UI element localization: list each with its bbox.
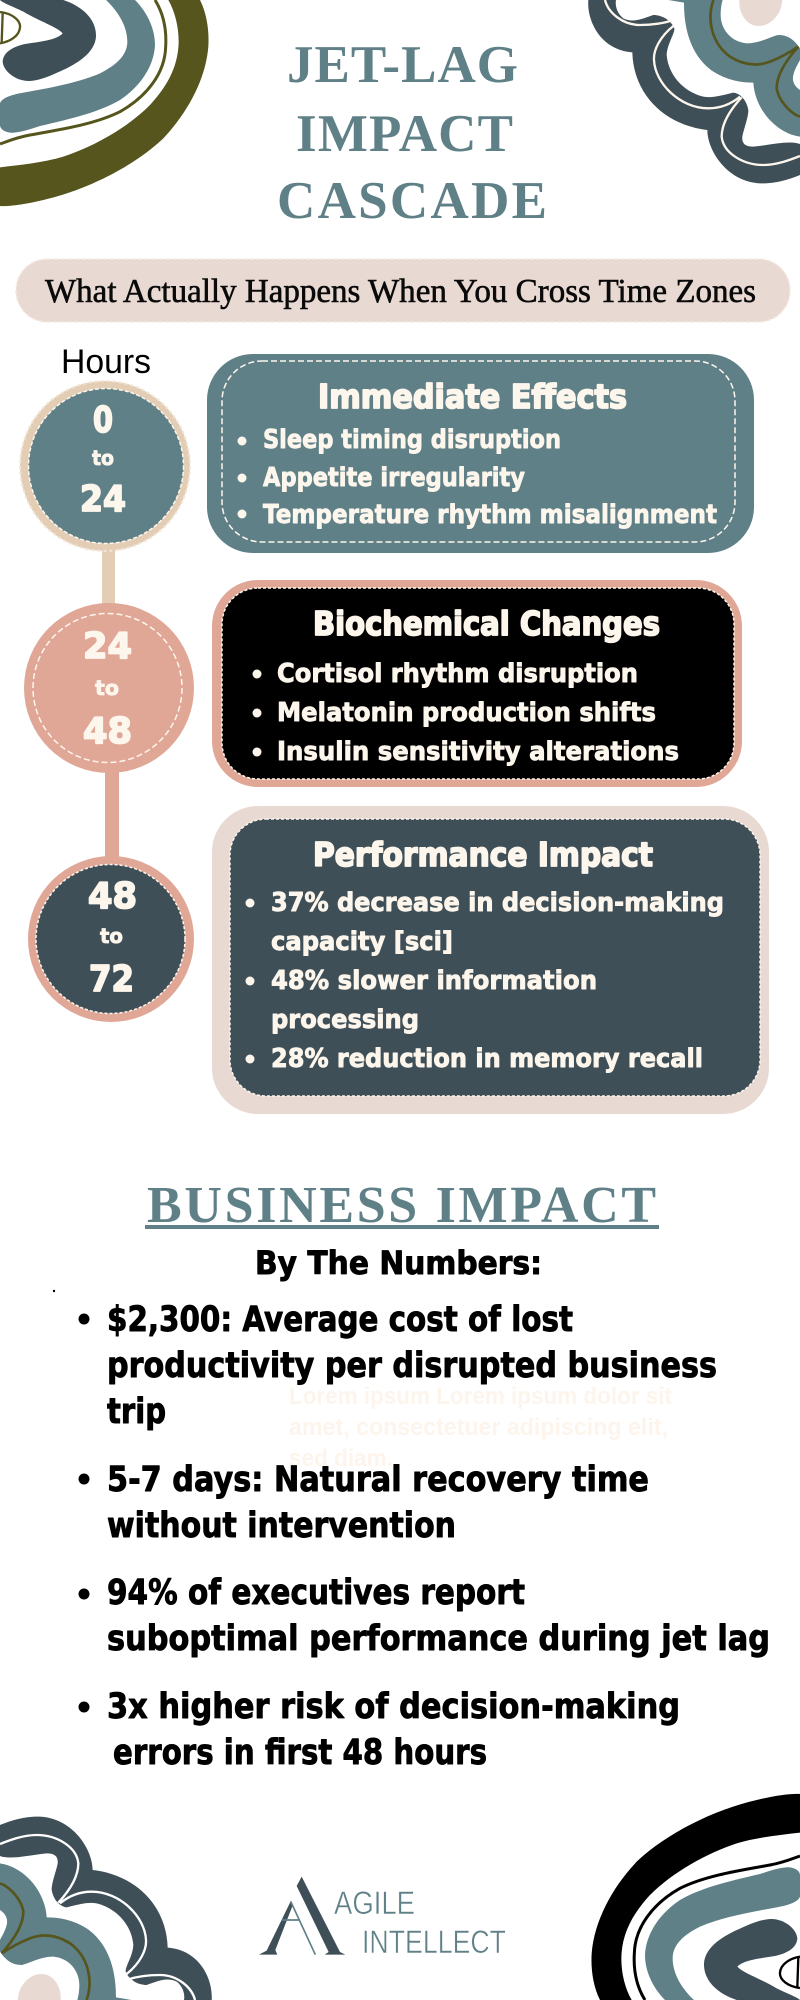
subheading: by the numbers: By The Numbers: — [255, 1244, 542, 1282]
faint placeholder text: amet, consectetuer adipiscing elit, — [289, 1414, 668, 1441]
list: performance impact: 48% slower information — [271, 966, 597, 996]
faint placeholder text: Lorem ipsum Lorem ipsum dolor sit — [289, 1383, 672, 1410]
connector: first to second circle — [102, 548, 115, 606]
list: biochemical changes: Melatonin production shifts — [277, 698, 656, 728]
heading: business impact: BUSINESS IMPACT — [147, 1177, 656, 1234]
heading: immediate effects: Immediate Effects — [318, 377, 627, 416]
label: hours: Hours — [61, 343, 151, 381]
timeline circle: 24 to 48 — [24, 603, 194, 773]
title — [277, 36, 547, 230]
faint placeholder text — [289, 1383, 672, 1472]
decoration: bottom-left scallops — [0, 1817, 212, 2000]
timeline circle: 48 to 72: to — [100, 924, 123, 948]
list: immediate effects: Sleep timing disruption — [263, 425, 561, 455]
title: JET-LAG — [287, 36, 518, 94]
list: performance impact — [246, 888, 724, 1074]
timeline circle: 0 to 24: to — [92, 446, 114, 470]
stat: cost of lost productivity: $2,300: Average cost of lost — [107, 1300, 573, 1340]
title: IMPACT — [296, 105, 513, 163]
list: biochemical changes — [252, 659, 679, 767]
timeline circle: 0 to 24: 0 — [93, 400, 113, 441]
logo: Agile Intellect — [259, 1877, 506, 1960]
list: performance impact: 37% decrease in decision-making — [271, 888, 724, 918]
faint placeholder text: sed diam. — [289, 1445, 393, 1472]
subtitle banner: What Actually Happens When You Cross Time Zones — [45, 273, 756, 310]
connector: second to third circle — [105, 770, 119, 860]
heading: performance impact: Performance Impact — [313, 835, 653, 874]
stat: executives — [78, 1573, 770, 1659]
stray dot — [53, 1290, 55, 1292]
logo wordmark — [334, 1885, 506, 1960]
list: immediate effects: Temperature rhythm misalignment — [263, 500, 717, 530]
stat: recovery time — [78, 1460, 649, 1546]
panel: performance impact — [212, 806, 769, 1114]
logo wordmark: INTELLECT — [362, 1924, 506, 1960]
stat: recovery time: without intervention — [107, 1506, 456, 1546]
stat: cost of lost productivity: productivity per disrupted business — [107, 1346, 717, 1386]
timeline circle: 24 to 48: 24 — [83, 626, 132, 667]
list: immediate effects — [238, 425, 717, 530]
panel: immediate effects — [207, 354, 754, 553]
timeline circle: 48 to 72: 72 — [89, 959, 134, 1000]
list: performance impact: processing — [271, 1005, 419, 1035]
stat: decision risk — [78, 1687, 680, 1773]
logo mark — [259, 1877, 345, 1955]
heading: biochemical changes: Biochemical Changes — [313, 604, 660, 643]
timeline circle: 24 to 48: to — [95, 676, 119, 700]
list: immediate effects: Appetite irregularity — [263, 463, 525, 493]
decoration: bottom-right swirl — [591, 1794, 800, 2000]
stat: cost of lost productivity: trip — [107, 1392, 166, 1432]
stat: decision risk: 3x higher risk of decision-making — [107, 1687, 680, 1727]
stat: decision risk: errors in first 48 hours — [113, 1733, 487, 1773]
list: performance impact: capacity [sci] — [271, 927, 453, 957]
list: biochemical changes: Cortisol rhythm disruption — [277, 659, 638, 689]
decoration: top-left swirl — [0, 0, 209, 206]
timeline circle: 24 to 48: 48 — [83, 711, 132, 752]
list: performance impact: 28% reduction in memory recall — [271, 1044, 703, 1074]
timeline circle: 0 to 24 — [20, 381, 190, 551]
timeline circle: 48 to 72 — [28, 856, 194, 1022]
list: business statistics — [78, 1300, 770, 1773]
list: biochemical changes: Insulin sensitivity alterations — [277, 737, 679, 767]
timeline circle: 0 to 24: 24 — [80, 479, 126, 520]
stat: executives: 94% of executives report — [107, 1573, 525, 1613]
subtitle banner — [16, 259, 790, 322]
logo wordmark: AGILE — [334, 1885, 415, 1921]
stat: recovery time: 5-7 days: Natural recovery time — [107, 1460, 649, 1500]
decoration: top-right scallops — [588, 0, 800, 183]
timeline circle: 48 to 72: 48 — [88, 876, 137, 917]
stat: cost of lost productivity — [78, 1300, 717, 1432]
title: CASCADE — [277, 172, 547, 230]
panel: biochemical changes — [212, 580, 742, 787]
